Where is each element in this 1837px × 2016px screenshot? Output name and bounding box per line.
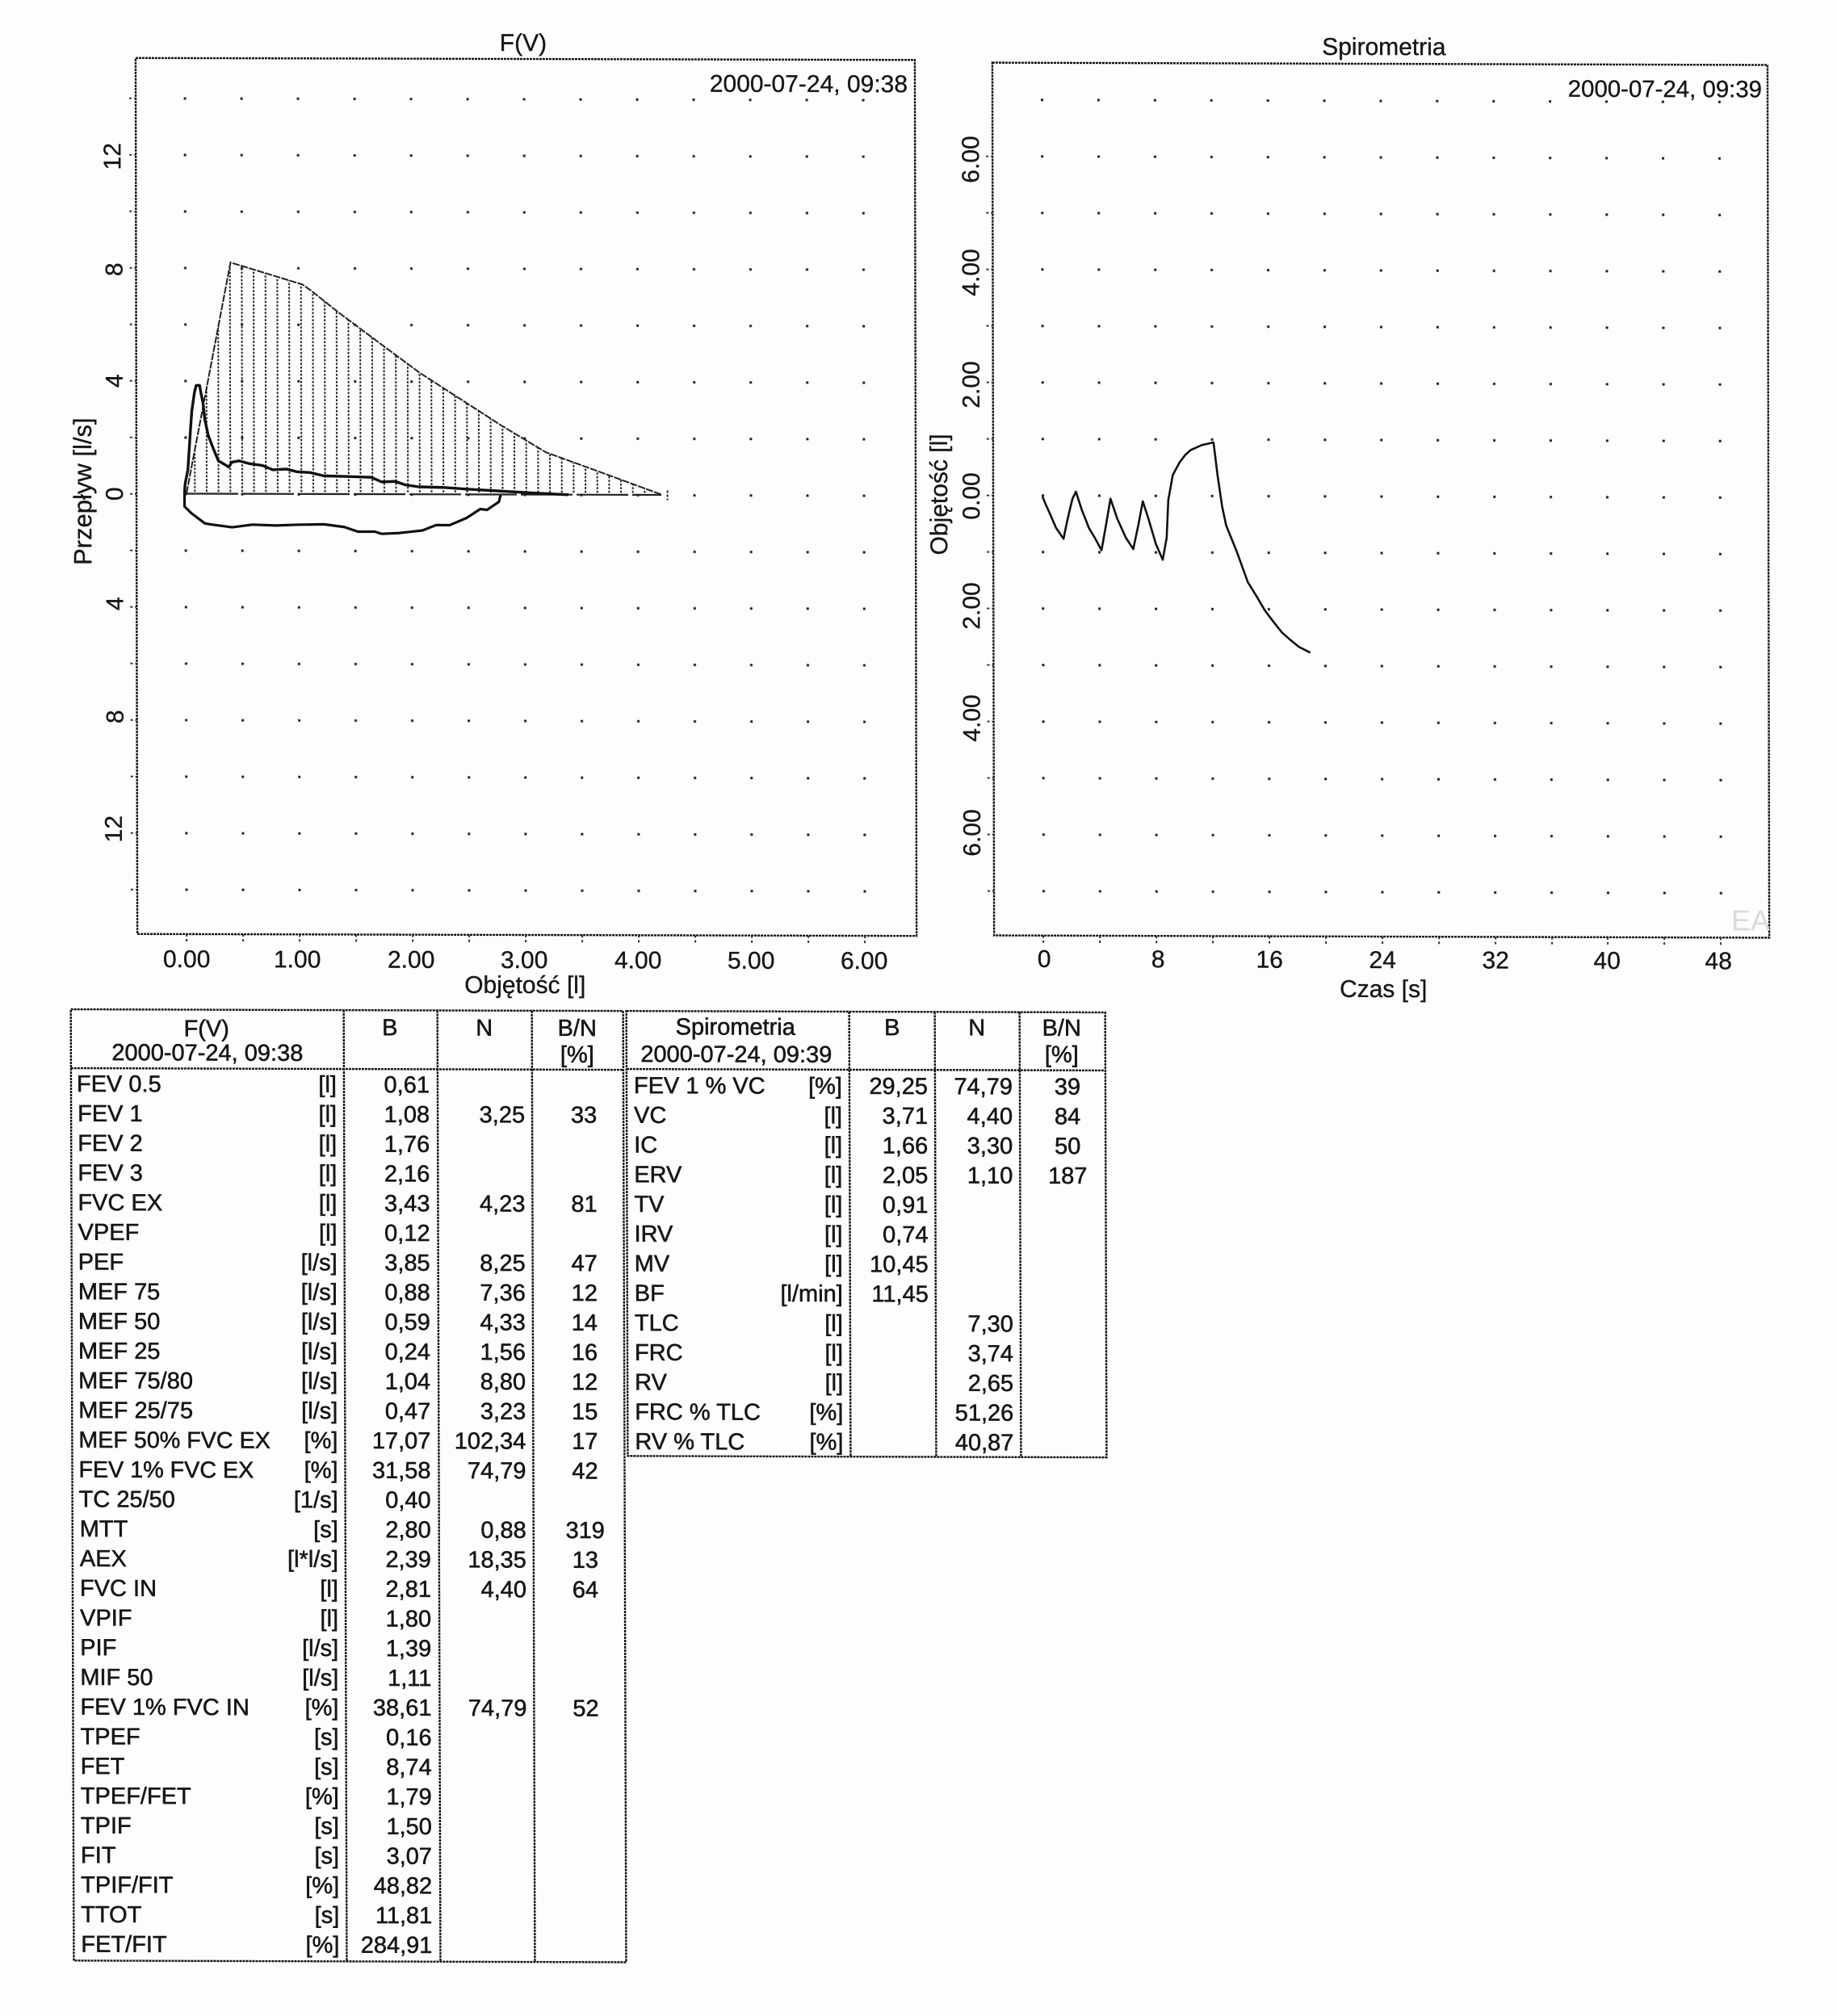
row: FVC EX: FVC EX xyxy=(78,1190,162,1216)
row: FEV 1% FVC IN xyxy=(80,1695,599,1722)
row: MEF 50% FVC EX: [%] xyxy=(304,1428,338,1454)
row: TTOT: 11,81 xyxy=(375,1903,432,1929)
table header: N xyxy=(476,1016,493,1042)
row: MEF 75: 0,88 xyxy=(384,1280,430,1306)
row: FRC % TLC xyxy=(635,1399,1013,1427)
row: FEV 3 xyxy=(78,1160,430,1188)
row: RV % TLC: 40,87 xyxy=(955,1430,1013,1456)
row: FEV 0.5: 0,61 xyxy=(384,1072,430,1098)
y-axis tick labels: 12 xyxy=(101,815,128,842)
row: MTT: MTT xyxy=(80,1516,128,1542)
row: MEF 25/75: 0,47 xyxy=(385,1398,430,1424)
row: TPIF xyxy=(81,1813,432,1840)
row: PEF: 3,85 xyxy=(384,1251,430,1276)
y-axis tick labels: 6.00 xyxy=(958,136,984,183)
row: MEF 25/75: [l/s] xyxy=(301,1398,338,1424)
row: FET xyxy=(81,1754,432,1780)
row: VPIF: [l] xyxy=(320,1606,338,1632)
row: FET/FIT xyxy=(81,1932,432,1959)
row: FEV 1: 33 xyxy=(571,1103,597,1129)
row: TC 25/50 xyxy=(79,1486,431,1514)
row: TPIF/FIT xyxy=(81,1872,432,1899)
row: TLC: TLC xyxy=(635,1310,679,1336)
row: TC 25/50: TC 25/50 xyxy=(79,1486,175,1513)
row: FEV 1% FVC EX: [%] xyxy=(304,1458,338,1484)
row: FEV 3: [l] xyxy=(319,1161,337,1187)
row: ERV: [l] xyxy=(824,1163,842,1188)
row: MEF 25: 1,56 xyxy=(480,1339,526,1365)
y-axis tick labels: 4 xyxy=(102,374,128,388)
row: IC: 50 xyxy=(1055,1134,1080,1159)
row: TV: 0,91 xyxy=(883,1192,928,1218)
row: MEF 75/80: [l/s] xyxy=(301,1368,338,1394)
row: FVC EX xyxy=(78,1190,598,1218)
row: FEV 1: FEV 1 xyxy=(78,1101,143,1127)
row: FET/FIT: FET/FIT xyxy=(81,1932,167,1958)
row: FRC: [l] xyxy=(824,1340,843,1367)
row: FEV 1 % VC: 29,25 xyxy=(869,1074,928,1100)
row: FVC EX: 81 xyxy=(571,1192,598,1218)
table header: 2000-07-24, 09:38 xyxy=(111,1040,303,1067)
data tables xyxy=(71,1009,1108,1964)
row: MEF 50% FVC EX: MEF 50% FVC EX xyxy=(78,1427,271,1454)
row: RV % TLC: RV % TLC xyxy=(635,1429,744,1455)
row: MEF 25: [l/s] xyxy=(301,1339,338,1365)
row: AEX: 2,39 xyxy=(385,1547,431,1573)
row: FEV 2: 1,76 xyxy=(384,1132,430,1158)
row: FEV 0.5: FEV 0.5 xyxy=(77,1071,161,1097)
row: MEF 25/75: MEF 25/75 xyxy=(78,1398,193,1424)
row: TPIF/FIT: [%] xyxy=(305,1873,339,1899)
predicted envelope, hatched xyxy=(186,262,668,500)
row: FEV 1: [l] xyxy=(318,1102,337,1128)
row: VC xyxy=(634,1103,1080,1130)
y-axis tick labels: 0 xyxy=(102,487,128,501)
table header: B xyxy=(382,1015,397,1041)
row: MEF 25: 16 xyxy=(572,1340,598,1366)
table header: [%] xyxy=(1045,1042,1079,1068)
row: RV % TLC xyxy=(635,1429,1013,1456)
row: ERV: ERV xyxy=(634,1162,682,1188)
row: FEV 1% FVC IN: 38,61 xyxy=(373,1695,431,1721)
row: FEV 2 xyxy=(78,1130,430,1158)
row: TC 25/50: [1/s] xyxy=(294,1487,338,1513)
row: VC: 4,40 xyxy=(967,1104,1013,1130)
row: IRV: IRV xyxy=(635,1222,673,1247)
row: MEF 25: 0,24 xyxy=(385,1339,430,1365)
row: VPEF: [l] xyxy=(319,1221,338,1247)
row: IRV: 0,74 xyxy=(883,1222,929,1248)
table header xyxy=(640,1014,1081,1069)
y-axis tick labels: 4.00 xyxy=(959,694,986,742)
row: TTOT xyxy=(81,1902,432,1929)
row: VPEF: VPEF xyxy=(78,1220,139,1246)
row: FIT xyxy=(81,1842,432,1870)
row: PIF xyxy=(80,1635,431,1662)
panel: F(V) table xyxy=(71,1009,626,1962)
row: MEF 50: MEF 50 xyxy=(78,1309,160,1335)
row: FVC IN: 2,81 xyxy=(385,1577,431,1603)
row: PEF xyxy=(78,1249,598,1276)
row: MEF 75/80 xyxy=(78,1368,598,1395)
row: PIF: 1,39 xyxy=(386,1636,431,1662)
y-axis tick labels: 8 xyxy=(103,710,129,723)
row: FEV 1 xyxy=(78,1101,597,1129)
row: MEF 25/75 xyxy=(78,1398,598,1425)
x-axis tick labels: 32 xyxy=(1482,947,1509,974)
measured inspiration curve xyxy=(184,493,501,534)
row: ERV: 1,10 xyxy=(967,1163,1013,1189)
row: VPIF: 1,80 xyxy=(386,1607,431,1632)
row: MEF 25 xyxy=(78,1339,598,1366)
timestamp: 2000-07-24, 09:39 xyxy=(1568,76,1762,103)
table grid xyxy=(627,1011,1106,1457)
x-axis tick labels: 4.00 xyxy=(614,947,661,974)
row: FRC % TLC: 51,26 xyxy=(955,1400,1013,1427)
row: MEF 50% FVC EX xyxy=(78,1427,598,1455)
row: TPEF: 0,16 xyxy=(386,1725,432,1751)
x-axis tick labels: 0 xyxy=(1038,946,1051,973)
y-axis tick labels xyxy=(99,143,129,842)
row: FEV 2: FEV 2 xyxy=(78,1130,143,1157)
row: TV: TV xyxy=(634,1192,665,1218)
x-axis tick labels: 24 xyxy=(1369,947,1396,974)
row: VC: VC xyxy=(634,1103,666,1129)
row: FEV 1% FVC EX: 74,79 xyxy=(468,1458,526,1484)
row: TPEF/FET xyxy=(81,1783,432,1810)
row: TPEF/FET: 1,79 xyxy=(386,1784,432,1810)
chart title: F(V) xyxy=(500,30,547,57)
row: FEV 2: [l] xyxy=(319,1131,337,1157)
row: FEV 1 % VC: 74,79 xyxy=(954,1074,1013,1100)
row: IRV: [l] xyxy=(824,1222,843,1248)
row: VC: 84 xyxy=(1055,1104,1080,1130)
row: MTT: 2,80 xyxy=(385,1517,431,1543)
row: FVC EX: [l] xyxy=(319,1191,337,1217)
row: IC xyxy=(634,1133,1080,1159)
row: TPEF/FET: [%] xyxy=(305,1784,339,1810)
row: FEV 1 % VC xyxy=(634,1073,1080,1100)
row: BF xyxy=(635,1280,929,1307)
row: MEF 25/75: 15 xyxy=(572,1399,598,1425)
row: FVC IN: FVC IN xyxy=(80,1576,157,1602)
row: FEV 1: 1,08 xyxy=(384,1102,430,1128)
row: AEX: 18,35 xyxy=(468,1547,526,1574)
row: MTT: [s] xyxy=(313,1517,338,1543)
row: FEV 1 % VC: 39 xyxy=(1055,1075,1080,1100)
x-axis tick labels: 40 xyxy=(1593,948,1621,974)
x-axis tick labels: 48 xyxy=(1705,948,1732,974)
row: MIF 50: 1,11 xyxy=(388,1666,431,1691)
row: FET/FIT: 284,91 xyxy=(361,1933,432,1959)
row: VPEF: 0,12 xyxy=(384,1221,430,1247)
table header: B/N xyxy=(558,1016,597,1042)
row: PEF: [l/s] xyxy=(301,1250,338,1276)
row: ERV: 187 xyxy=(1048,1163,1088,1189)
row: FRC: 3,74 xyxy=(968,1341,1013,1367)
row: FIT: 3,07 xyxy=(387,1844,432,1870)
row: FEV 1% FVC EX xyxy=(78,1457,598,1485)
row: FRC xyxy=(635,1340,1013,1367)
volume curve xyxy=(1042,442,1311,652)
row: MEF 75: MEF 75 xyxy=(78,1279,160,1306)
panel: F(V) flow-volume chart xyxy=(68,29,916,1000)
row: TLC: 7,30 xyxy=(967,1311,1013,1337)
x-axis tick labels: 6.00 xyxy=(841,948,887,974)
row: FRC: FRC xyxy=(635,1340,683,1366)
table header: B/N xyxy=(1042,1016,1081,1042)
row: FEV 1% FVC EX: FEV 1% FVC EX xyxy=(78,1457,254,1483)
row: TV xyxy=(634,1192,928,1218)
row: MEF 50% FVC EX: 17,07 xyxy=(372,1428,430,1454)
dot grid xyxy=(157,70,893,920)
axis ticks xyxy=(129,98,865,943)
row: FEV 1: 3,25 xyxy=(480,1102,525,1128)
row: FEV 0.5 xyxy=(77,1071,430,1098)
x-axis tick labels: 0.00 xyxy=(163,946,210,973)
row: PEF: 47 xyxy=(571,1251,598,1276)
row: MEF 50: 0,59 xyxy=(384,1310,430,1335)
row: MTT xyxy=(80,1516,605,1544)
row: FEV 1% FVC IN: [%] xyxy=(304,1695,338,1721)
row: FEV 1% FVC IN: 52 xyxy=(572,1695,599,1722)
row: TC 25/50: 0,40 xyxy=(385,1488,431,1514)
y-axis tick labels: 12 xyxy=(99,143,126,170)
row: TV: [l] xyxy=(824,1192,842,1218)
row: RV: 2,65 xyxy=(968,1371,1013,1397)
row: TPEF xyxy=(81,1724,432,1751)
y-axis title: Objętość [l] xyxy=(926,434,953,555)
row: ERV: 2,05 xyxy=(883,1163,928,1188)
table grid xyxy=(71,1009,626,1962)
y-axis tick labels: 0.00 xyxy=(958,472,985,520)
row: MV xyxy=(635,1251,929,1278)
row: MIF 50 xyxy=(80,1665,431,1691)
row: TTOT: TTOT xyxy=(81,1902,142,1928)
row: MEF 75: 7,36 xyxy=(480,1280,526,1306)
row: MV: MV xyxy=(635,1251,670,1277)
y-axis tick labels: 6.00 xyxy=(959,809,986,857)
table header: B xyxy=(884,1015,900,1041)
row: IC: 1,66 xyxy=(883,1133,928,1159)
row: FET: 8,74 xyxy=(386,1754,432,1780)
row: FET/FIT: [%] xyxy=(305,1932,339,1959)
row: PIF: PIF xyxy=(80,1635,116,1661)
row: BF: BF xyxy=(635,1280,665,1306)
panel: Spirometria volume-time chart xyxy=(925,32,1770,1004)
row: TLC: [l] xyxy=(824,1311,843,1337)
row: TPIF/FIT: 48,82 xyxy=(374,1873,432,1899)
row: FVC EX: 4,23 xyxy=(480,1191,525,1218)
x-axis title: Objętość [l] xyxy=(464,972,585,999)
row: TPIF: 1,50 xyxy=(386,1814,432,1840)
row: PEF: PEF xyxy=(78,1249,124,1276)
row: BF: 11,45 xyxy=(871,1281,929,1307)
x-axis tick labels: 2.00 xyxy=(388,947,434,974)
row: AEX xyxy=(80,1546,598,1574)
row: FEV 1 % VC: [%] xyxy=(808,1074,842,1100)
axis ticks xyxy=(986,157,1721,945)
x-axis tick labels xyxy=(163,946,887,974)
row: MEF 75: 12 xyxy=(572,1280,598,1306)
row: VPIF xyxy=(80,1605,431,1632)
row: FET: [s] xyxy=(314,1754,339,1780)
table header: N xyxy=(968,1015,985,1041)
row: MEF 25/75: 3,23 xyxy=(480,1399,526,1425)
row: FRC % TLC: FRC % TLC xyxy=(635,1399,761,1426)
row: IC: IC xyxy=(634,1133,657,1159)
row: TPEF/FET: TPEF/FET xyxy=(81,1783,191,1809)
row: MEF 75/80: 8,80 xyxy=(480,1369,526,1395)
row: VC: [l] xyxy=(824,1104,842,1130)
row: TPIF: [s] xyxy=(314,1814,339,1840)
row: FRC % TLC: [%] xyxy=(809,1400,843,1426)
row: FET: FET xyxy=(81,1754,125,1779)
table header: [%] xyxy=(560,1042,594,1068)
y-axis tick labels xyxy=(958,136,986,857)
y-axis tick labels: 2.00 xyxy=(958,361,985,409)
row: RV % TLC: [%] xyxy=(809,1430,843,1456)
row: FVC IN: [l] xyxy=(320,1577,338,1603)
row: VPEF xyxy=(78,1220,430,1247)
row: FEV 1% FVC IN: 74,79 xyxy=(468,1695,526,1721)
row: MV: 10,45 xyxy=(870,1251,929,1278)
row: MEF 75: [l/s] xyxy=(301,1280,338,1306)
y-axis tick labels: 4.00 xyxy=(958,249,985,296)
row: MEF 25: MEF 25 xyxy=(78,1339,161,1364)
y-axis tick labels: 2.00 xyxy=(958,582,985,630)
x-axis tick labels: 8 xyxy=(1151,946,1165,973)
table header: Spirometria xyxy=(676,1014,796,1041)
row: TTOT: [s] xyxy=(315,1903,339,1929)
x-axis tick labels: 16 xyxy=(1256,947,1283,974)
row: MEF 50: 4,33 xyxy=(480,1310,526,1336)
row: AEX: [l*l/s] xyxy=(287,1547,338,1573)
row: MTT: 319 xyxy=(565,1518,605,1544)
row: FEV 1% FVC EX: 31,58 xyxy=(372,1458,431,1484)
row: TPEF: [s] xyxy=(314,1725,339,1750)
panel: Spirometria table xyxy=(627,1011,1106,1457)
x-axis tick labels: 3.00 xyxy=(501,947,547,974)
row: FEV 3: 2,16 xyxy=(384,1161,430,1188)
x-axis title: Czas [s] xyxy=(1340,976,1427,1003)
chart frame xyxy=(992,63,1769,937)
row: FEV 1% FVC IN: FEV 1% FVC IN xyxy=(80,1695,250,1721)
row: MEF 50 xyxy=(78,1309,598,1336)
row: MIF 50: MIF 50 xyxy=(80,1665,153,1691)
row: MEF 75/80: 1,04 xyxy=(385,1369,430,1395)
timestamp: 2000-07-24, 09:38 xyxy=(710,71,908,98)
table header xyxy=(111,1014,597,1068)
row: MEF 75 xyxy=(78,1279,598,1306)
chart frame xyxy=(136,58,916,936)
row: FVC EX: 3,43 xyxy=(384,1191,430,1217)
row: PIF: [l/s] xyxy=(302,1636,338,1662)
x-axis tick labels: 5.00 xyxy=(728,948,774,974)
x-axis tick labels xyxy=(1038,946,1732,974)
row: BF: [l/min] xyxy=(780,1281,843,1307)
row: MEF 75/80: 12 xyxy=(572,1369,598,1395)
row: MV: [l] xyxy=(824,1251,843,1277)
row: FIT: FIT xyxy=(81,1842,116,1868)
row: FVC IN: 4,40 xyxy=(480,1577,526,1603)
row: FIT: [s] xyxy=(314,1843,339,1869)
row: MTT: 0,88 xyxy=(480,1518,526,1544)
y-axis tick labels: 8 xyxy=(101,262,128,276)
row: FEV 3: FEV 3 xyxy=(78,1160,143,1186)
row: TPIF/FIT: TPIF/FIT xyxy=(81,1872,174,1898)
row: ERV xyxy=(634,1162,1088,1189)
row: PEF: 8,25 xyxy=(480,1251,526,1276)
row: TPEF: TPEF xyxy=(81,1724,141,1750)
faint watermark: EA xyxy=(1731,903,1770,937)
table header: F(V) xyxy=(184,1016,229,1042)
row: IC: [l] xyxy=(824,1133,842,1159)
row: FEV 1% FVC EX: 42 xyxy=(572,1459,598,1485)
y-axis tick labels: 4 xyxy=(102,597,128,610)
row: FVC IN: 64 xyxy=(572,1578,598,1603)
row: RV: [l] xyxy=(825,1370,843,1396)
row: AEX: AEX xyxy=(80,1546,127,1572)
row: IRV xyxy=(635,1222,929,1248)
row: MEF 50% FVC EX: 17 xyxy=(572,1429,598,1455)
row: MEF 50% FVC EX: 102,34 xyxy=(455,1428,526,1455)
row: VPIF: VPIF xyxy=(80,1605,132,1632)
measured expiration curve xyxy=(184,385,568,495)
row: TLC xyxy=(635,1310,1013,1337)
dot grid xyxy=(1013,72,1750,921)
row: AEX: 13 xyxy=(572,1548,598,1574)
row: MEF 50: 14 xyxy=(572,1310,598,1336)
row: RV: RV xyxy=(635,1370,668,1396)
row: IC: 3,30 xyxy=(967,1134,1013,1159)
row: TPIF: TPIF xyxy=(81,1813,132,1839)
chart title: Spirometria xyxy=(1322,34,1446,61)
row: FEV 1 % VC: FEV 1 % VC xyxy=(634,1073,765,1100)
row: FEV 0.5: [l] xyxy=(318,1072,337,1098)
y-axis title: Przepływ [l/s] xyxy=(69,417,97,565)
table header: 2000-07-24, 09:39 xyxy=(640,1042,832,1068)
row: MEF 75/80: MEF 75/80 xyxy=(78,1368,193,1394)
row: RV xyxy=(635,1370,1013,1397)
row: MEF 50: [l/s] xyxy=(301,1310,338,1335)
row: MIF 50: [l/s] xyxy=(302,1666,338,1691)
row: FVC IN xyxy=(80,1576,598,1603)
row: VC: 3,71 xyxy=(883,1104,928,1130)
x-axis tick labels: 1.00 xyxy=(274,946,321,973)
